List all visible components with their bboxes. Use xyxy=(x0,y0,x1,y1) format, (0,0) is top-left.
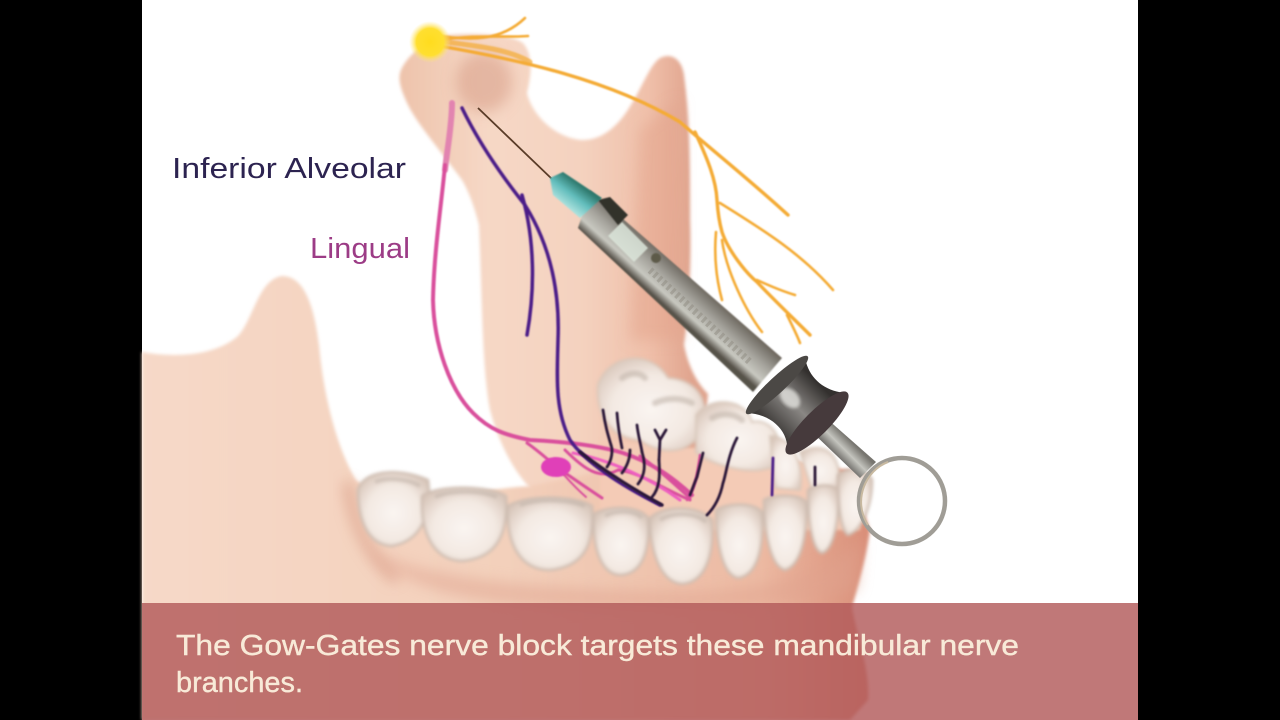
lingual ganglion xyxy=(541,457,571,477)
white stage background xyxy=(142,0,1138,720)
front tooth fissures xyxy=(375,479,706,522)
illustration: mandible with nerves and syringe xyxy=(142,18,945,720)
nerve origin spark xyxy=(409,21,451,63)
needle xyxy=(478,108,553,180)
syringe xyxy=(550,172,945,544)
caption text: branches. xyxy=(176,667,303,699)
caption text: The Gow-Gates nerve block targets these mandibular nerve xyxy=(176,630,1019,662)
syringe scale markings xyxy=(650,270,750,362)
syringe thumb ring xyxy=(859,458,945,544)
back teeth row xyxy=(598,359,840,490)
syringe barrel xyxy=(578,190,782,392)
label: Lingual: Lingual xyxy=(310,233,410,265)
label: Inferior Alveolar: Inferior Alveolar xyxy=(172,153,406,185)
jaw bone: near body xyxy=(142,276,870,720)
tooth nerve branches xyxy=(580,410,815,515)
gum shadow left of teeth xyxy=(348,482,397,580)
molar surface shading xyxy=(622,374,742,420)
ramus shading xyxy=(456,52,682,340)
syringe flange: near disc xyxy=(741,351,813,419)
jaw bone: far ramus xyxy=(399,34,708,490)
syringe plunger rod xyxy=(812,418,876,478)
front teeth row xyxy=(358,470,872,584)
condyle shadow xyxy=(456,52,512,112)
nerve: lingual (magenta) xyxy=(433,103,700,500)
syringe flange: far disc xyxy=(778,384,856,462)
ring inner edge xyxy=(861,462,888,525)
syringe glass cartridge xyxy=(608,222,648,262)
syringe flange: waist highlight xyxy=(776,384,804,412)
syringe teal hub xyxy=(550,172,602,218)
syringe small dark spot xyxy=(651,253,661,263)
nerve: orange auriculotemporal and buccal branches xyxy=(440,18,833,343)
caption band xyxy=(142,603,1138,720)
caption background xyxy=(142,603,1138,720)
ramus right shadow xyxy=(630,100,682,340)
peach gum behind back teeth xyxy=(600,440,860,530)
gum shadow under teeth xyxy=(370,540,862,608)
syringe flange: spool body xyxy=(747,357,847,453)
ring outer band xyxy=(859,458,945,544)
nerve: inferior alveolar (purple) xyxy=(462,108,660,505)
syringe dark window xyxy=(598,197,628,225)
